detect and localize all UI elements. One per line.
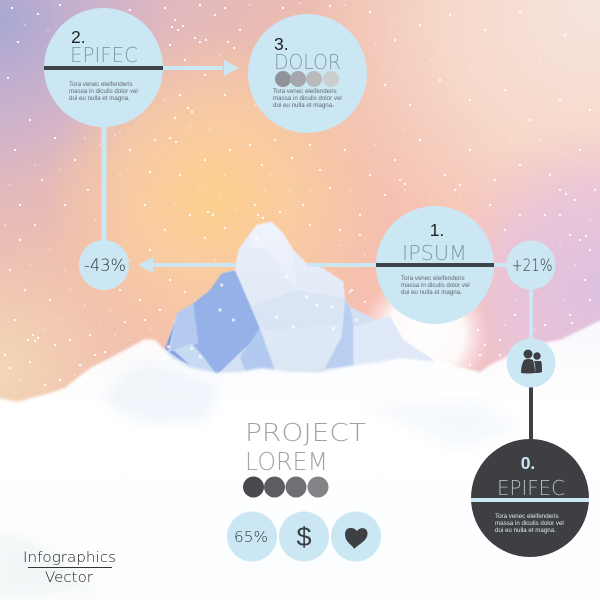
callout: minus 43 percent: -43% — [84, 256, 126, 276]
stat: 65 percent: 65% — [234, 528, 268, 546]
callout: plus 21 percent: +21% — [512, 256, 552, 276]
palette dots — [243, 476, 328, 498]
panel: step 2 Epifec: 2. — [71, 27, 86, 47]
panel: step 0 Epifec dark — [471, 439, 589, 557]
panel: step 0 Epifec dark: dui eu nulla et magna. — [495, 527, 556, 534]
panel: step 1 Ipsum: IPSUM — [402, 241, 467, 265]
title: project lorem — [245, 418, 366, 476]
panel: step 1 Ipsum: dui eu nulla et magna. — [401, 289, 462, 296]
icon: dollar: $ — [296, 522, 312, 552]
callout: plus 21 percent — [494, 240, 556, 290]
brand: Infographics Vector: Infographics — [23, 550, 116, 566]
panel: step 3 Dolor — [248, 14, 367, 133]
title: project lorem: PROJECT — [245, 418, 366, 447]
panel: step 2 Epifec: Tora venec eleifenderis — [69, 81, 133, 88]
panel: step 1 Ipsum: Tora venec eleifenderis — [401, 275, 465, 282]
panel: step 0 Epifec dark: massa in diculis dolor vel — [495, 520, 564, 527]
snow specks on sky — [5, 5, 595, 385]
stat: 65 percent — [227, 512, 277, 562]
icon: heart — [331, 512, 381, 562]
panel: step 3 Dolor: dui eu nulla et magna. — [273, 102, 334, 109]
panel: step 1 Ipsum: massa in diculis dolor vel — [401, 282, 470, 289]
panel: step 3 Dolor: 3. — [274, 34, 289, 54]
connector: plus 21 to people icon — [529, 287, 533, 341]
brand: Infographics Vector: Vector — [45, 570, 93, 586]
clouds — [0, 318, 600, 600]
callout: minus 43 percent — [79, 240, 129, 290]
connector: circle 1 to minus 43 arrow — [138, 257, 377, 273]
connector: people icon to circle 0 — [529, 386, 533, 440]
panel: step 3 Dolor: DOLOR — [274, 50, 341, 74]
title: project lorem: LOREM — [245, 447, 328, 476]
panel: step 0 Epifec dark: EPIFEC — [497, 476, 565, 500]
connector: circle 2 to circle 3 arrow — [163, 60, 239, 76]
panel: step 2 Epifec: EPIFEC — [70, 43, 138, 67]
connector: circle 2 down to minus 43 — [102, 125, 106, 241]
panel: step 1 Ipsum: 1. — [430, 220, 444, 240]
panel: step 2 Epifec — [44, 8, 163, 127]
panel: step 3 Dolor: massa in diculis dolor vel — [273, 95, 342, 102]
panel: step 0 Epifec dark: Tora venec eleifenderis — [495, 513, 559, 520]
iceberg mountain — [163, 222, 433, 390]
panel: step 1 Ipsum — [376, 206, 494, 324]
brand: Infographics Vector — [23, 550, 116, 586]
panel: step 0 Epifec dark: 0. — [521, 453, 535, 473]
panel: step 3 Dolor: Tora venec eleifenderis — [273, 88, 337, 95]
panel: step 2 Epifec: dui eu nulla et magna. — [69, 95, 130, 102]
icon: people — [506, 338, 556, 388]
panel: step 2 Epifec: massa in diculis dolor vel — [69, 88, 138, 95]
icon: dollar — [279, 512, 329, 562]
